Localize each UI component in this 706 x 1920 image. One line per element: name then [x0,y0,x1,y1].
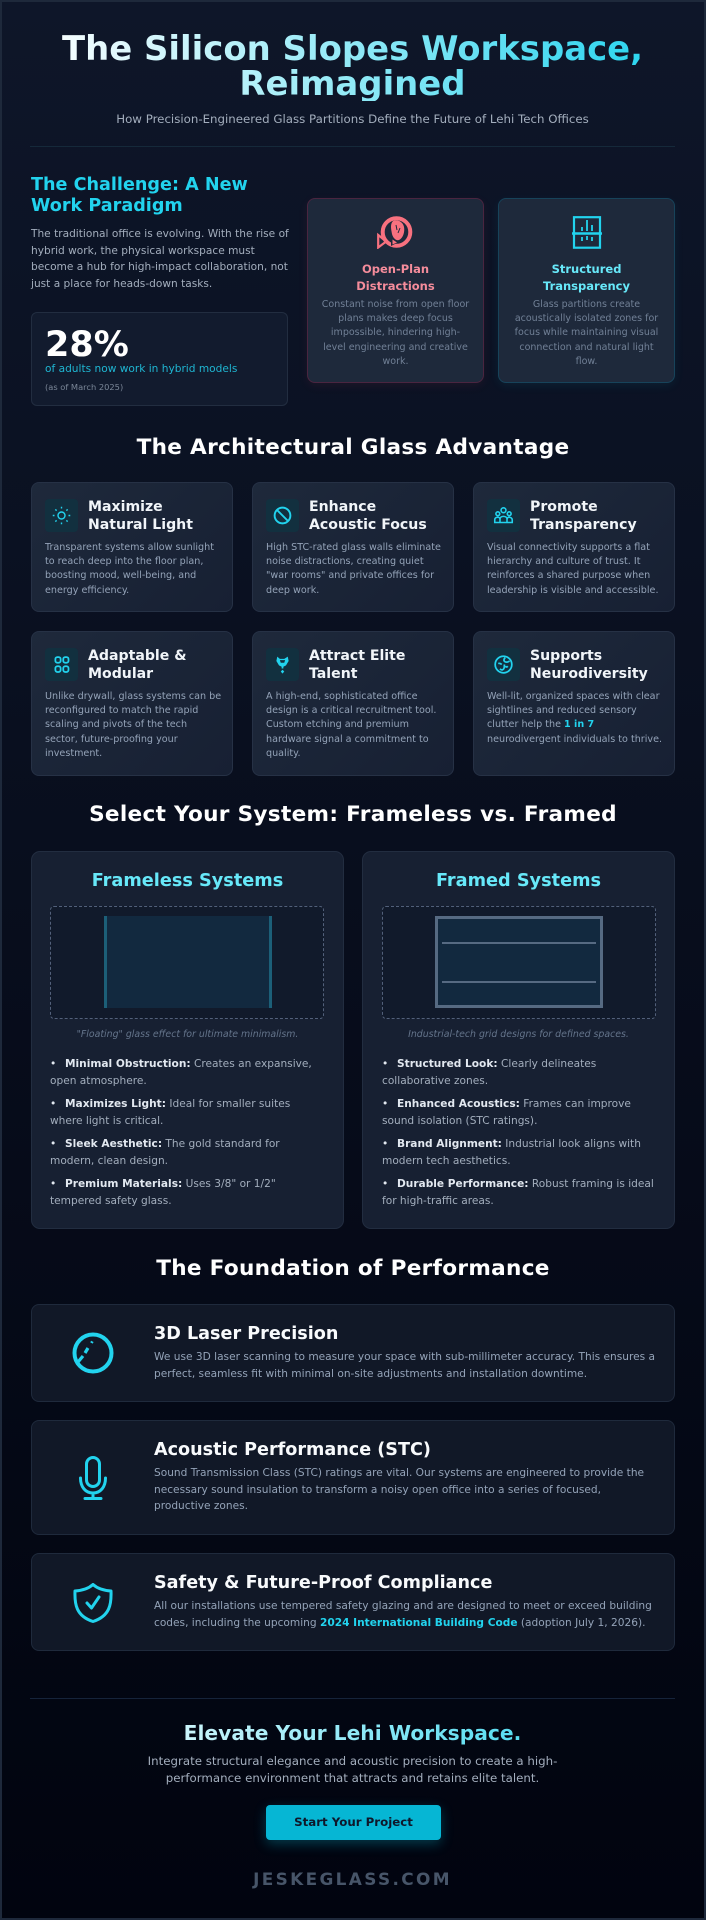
bullet: modern, clean design. [50,1155,168,1167]
text [44,542,214,596]
card title [543,262,630,292]
title: Safety & Future-Proof Compliance [154,1572,492,1592]
challenge paragraph: just a place for heads-down tasks. [31,278,212,290]
card title [356,262,435,292]
icon: distraction [377,216,412,249]
card text: focus while maintaining visual [515,327,658,338]
title: 3D Laser Precision [154,1324,338,1344]
bullet [382,1098,631,1127]
text [154,1351,655,1380]
card: modular [31,631,233,776]
panel title: Framed Systems [436,871,601,891]
bullet: Durable Performance: Robust framing is ideal [397,1178,654,1190]
bullet [382,1138,641,1167]
bullet: • [50,1058,56,1070]
text [154,1467,644,1512]
challenge heading: Work Paradigm [31,196,183,216]
bullet: Structured Look: Clearly delineates [397,1058,596,1070]
text: necessary sound insulation to transform a noisy open office into a series of focused, [154,1484,601,1496]
icon: shield check [73,1583,113,1623]
icon: sun [45,499,78,532]
bullet: open atmosphere. [50,1075,147,1087]
card: natural light [31,482,233,612]
title: Maximize [88,498,163,514]
bullet: Premium Materials: Uses 3/8" or 1/2" [65,1178,276,1190]
section heading: advantage: The Architectural Glass Advantage [137,434,569,460]
icon: structured glass [572,216,602,249]
card text: impossible, hindering high- [331,327,460,338]
bullet: • [50,1138,56,1150]
cta text: Integrate structural elegance and acoustic precision to create a high- [148,1754,557,1768]
challenge paragraph [30,228,289,290]
title: Supports [530,648,602,664]
card: neurodiversity [473,631,675,776]
title: Adaptable & [88,648,187,664]
text [266,691,436,759]
card text: Constant noise from open floor [322,299,469,310]
text: productive zones. [154,1500,248,1512]
card text: work. [382,356,408,367]
text: sightlines and reduced sensory [487,705,637,716]
text: sector, future-proofing your [45,734,178,745]
stat number: 28% [45,325,129,365]
text: energy efficiency. [45,585,129,596]
bullet: • [382,1058,388,1070]
challenge paragraph: become a hub for high-impact collaboration, not [31,261,288,273]
panel: safety compliance [31,1553,675,1651]
panel title: Frameless Systems [92,871,283,891]
text: deep work. [266,585,319,596]
card title: Open-Plan [362,262,429,276]
text: Well-lit, organized spaces with clear [487,691,660,702]
bullet [382,1178,654,1207]
card: structured transparency [498,198,675,383]
bullet: • [382,1098,388,1110]
section heading: select system: Select Your System: Frameless vs. Framed [89,802,617,827]
website footer: JESKEGLASS.COM [253,1869,452,1889]
panel: framed systems [362,851,675,1229]
diagram container [382,906,656,1019]
card title: Structured [552,262,621,276]
title [88,498,193,533]
bullet: • [50,1098,56,1110]
title: Modular [88,666,153,682]
text [154,1600,652,1629]
icon: microphone [79,1456,107,1500]
title: Enhance [309,498,376,514]
diagram: frameless glass [104,916,272,1008]
bullet: Maximizes Light: Ideal for smaller suites [65,1098,290,1110]
bullet [382,1058,596,1087]
bullet: for high-traffic areas. [382,1195,494,1207]
card text: level engineering and creative [323,342,468,353]
challenge paragraph: The traditional office is evolving. With the rise of [31,228,289,240]
card: transparency [473,482,675,612]
panel: frameless systems [31,851,344,1229]
text: boosting mood, well-being, and [45,570,196,581]
text: Transparent systems allow sunlight [45,542,214,553]
title [530,648,648,682]
title: Promote [530,498,598,514]
header title [30,31,675,101]
header title: The Silicon Slopes Workspace, [62,29,643,68]
title: Talent [309,666,357,682]
stat label: of adults now work in hybrid models [45,363,237,375]
bullet [50,1058,312,1087]
title: Acoustic Focus [309,517,427,533]
header subtitle: How Precision-Engineered Glass Partitions Define the Future of Lehi Tech Offices [116,112,589,126]
bullet: Brand Alignment: Industrial look aligns with [397,1138,641,1150]
bullet: modern tech aesthetics. [382,1155,511,1167]
title [530,498,637,533]
text: neurodivergent individuals to thrive. [487,734,662,745]
card: acoustic focus [252,482,454,612]
text [487,542,658,596]
card title: Distractions [356,278,435,292]
caption: "Floating" glass effect for ultimate minimalism. [77,1029,298,1040]
title: Attract Elite [309,648,405,664]
text: design is a critical recruitment tool. [266,705,436,716]
icon: team [487,499,520,532]
text: Visual connectivity supports a flat [487,542,650,553]
text: Custom etching and premium [266,719,409,730]
text: leadership is visible and accessible. [487,585,658,596]
title: Acoustic Performance (STC) [154,1440,431,1460]
bullet: • [382,1138,388,1150]
text [487,691,662,745]
text: noise distractions, creating quiet [266,556,424,567]
text: reconfigured to match the rapid [45,705,198,716]
text: A high-end, sophisticated office [266,691,418,702]
bullet [50,1138,280,1167]
bullet: where light is critical. [50,1115,163,1127]
title: Neurodiversity [530,666,648,682]
card text: plans makes deep focus [338,313,453,324]
challenge heading [31,174,248,216]
text: to reach deep into the floor plan, [45,556,203,567]
challenge heading: The Challenge: A New [31,174,248,194]
card text [322,299,470,367]
text: hierarchy and culture of trust. It [487,556,640,567]
bullet [50,1098,290,1127]
text: hardware signal a commitment to [266,734,429,745]
text [266,542,441,596]
bullet: Sleek Aesthetic: The gold standard for [65,1138,280,1150]
section heading: foundation: The Foundation of Performance [156,1256,550,1281]
cta button [266,1805,441,1840]
text: clutter help the 1 in 7 [487,719,594,730]
bullet: • [50,1178,56,1190]
text: perfect, seamless fit with minimal on-site adjustments and installation downtime. [154,1368,587,1380]
text: investment. [45,748,102,759]
icon: trophy [266,648,299,681]
cta heading [30,1720,675,1747]
text: scaling and pivots of the tech [45,719,187,730]
cta button: Start Your Project [294,1815,413,1829]
card: elite talent [252,631,454,776]
panel: acoustic performance [31,1420,675,1535]
panel: 3D laser precision [31,1304,675,1402]
icon: ban [266,499,299,532]
title [309,648,405,682]
cta heading: Elevate Your Lehi Workspace. [184,1721,521,1745]
header title: Reimagined [239,64,466,103]
challenge paragraph: hybrid work, the physical workspace must [31,245,255,257]
text: codes, including the upcoming 2024 International Building Code (adoption July 1, 2026). [154,1617,645,1629]
title [309,498,427,533]
text: "war rooms" and private offices for [266,570,434,581]
diagram: framed glass [435,916,603,1008]
bullet: collaborative zones. [382,1075,488,1087]
cta text [148,1754,557,1785]
card text: acoustically isolated zones for [515,313,658,324]
icon: grid [45,648,78,681]
text: We use 3D laser scanning to measure your space with sub-millimeter accuracy. This ensures a [154,1351,655,1363]
text [45,691,221,759]
text: Unlike drywall, glass systems can be [45,691,221,702]
card: open-plan distractions [307,198,484,383]
icon: mind [487,648,520,681]
card text: flow. [576,356,597,367]
text: quality. [266,748,301,759]
text: All our installations use tempered safety glazing and are designed to meet or exceed building [154,1600,652,1612]
stat source: (as of March 2025) [45,382,123,392]
text: Sound Transmission Class (STC) ratings are vital. Our systems are engineered to provide the [154,1467,644,1479]
text: High STC-rated glass walls eliminate [266,542,441,553]
icon: laser gauge [72,1332,114,1374]
diagram container [50,906,324,1019]
stat box: 28% hybrid [31,312,288,406]
card text: Glass partitions create [533,299,640,310]
bullet: • [382,1178,388,1190]
bullet: tempered safety glass. [50,1195,172,1207]
cta text: performance environment that attracts and retains elite talent. [166,1771,539,1785]
title: Natural Light [88,517,193,533]
title [88,648,187,682]
text: reinforces a shared purpose when [487,570,650,581]
card text: connection and natural light [519,342,654,353]
bullet: Minimal Obstruction: Creates an expansive, [65,1058,312,1070]
card title: Transparency [543,278,630,292]
title: Transparency [530,517,637,533]
card text [514,299,658,367]
bullet: Enhanced Acoustics: Frames can improve [397,1098,631,1110]
bullet: sound isolation (STC ratings). [382,1115,537,1127]
caption: Industrial-tech grid designs for defined spaces. [408,1029,629,1040]
bullet [50,1178,276,1207]
